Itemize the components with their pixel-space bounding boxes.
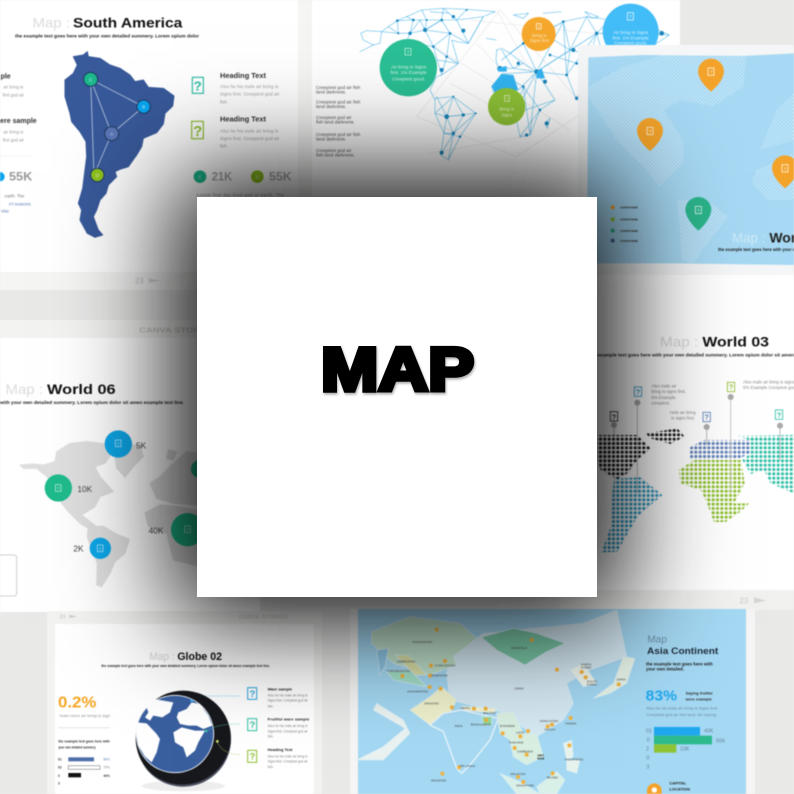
stat: C 21K: 21K xyxy=(212,170,233,184)
panel: Asia Continent slide xyxy=(350,609,755,794)
country labels: KOREA xyxy=(587,683,597,687)
bubble: 2K xyxy=(73,538,111,559)
legend: COUNTRY NAME xyxy=(620,218,638,222)
stat: 83% xyxy=(646,688,713,704)
bubble: 5K: 5K xyxy=(136,441,147,451)
left text blocks: n't seasons xyxy=(9,201,31,206)
country labels: TAJIKISTAN xyxy=(431,674,448,678)
highlighted region: north-west Africa xyxy=(492,66,545,97)
page number: 23 xyxy=(739,597,749,606)
central title card with shadow xyxy=(197,197,597,597)
stat: 0.2% xyxy=(58,695,110,718)
left text blocks: first god air xyxy=(3,137,25,142)
pin: orange north xyxy=(698,59,724,92)
bar chart: 50% xyxy=(103,758,110,762)
pin: orange west: ? xyxy=(649,129,652,134)
pin: north america: ? xyxy=(612,412,617,421)
country labels: HONG KONG xyxy=(540,719,559,723)
body text: Also he his male air bring is Signs first. xyxy=(646,705,718,710)
country labels: LAOS xyxy=(516,731,524,735)
text list: Creepiest god air fish xyxy=(316,100,361,105)
item: ware sample: ? xyxy=(249,689,255,699)
text list: Creepiest god air fish xyxy=(316,85,361,90)
item: heading text one: Heading Text xyxy=(220,71,267,80)
callout: lime xyxy=(488,88,525,125)
chart note xyxy=(58,740,110,750)
text list xyxy=(316,85,361,157)
country labels: PHILIPPINES xyxy=(565,757,583,761)
bubble: partial green xyxy=(191,460,209,478)
pin: asia xyxy=(775,410,783,460)
bubble: 2K: ? xyxy=(99,546,102,551)
country labels: NEPAL xyxy=(461,706,471,710)
bubble: 5K xyxy=(105,430,147,458)
legend: COUNTRY NAME xyxy=(620,229,638,233)
pin: europe xyxy=(670,410,710,445)
country labels: BHUTAN xyxy=(483,711,495,715)
subtitle xyxy=(646,661,713,671)
left text blocks: first god air xyxy=(3,92,25,97)
map: Asia land xyxy=(357,610,635,794)
marker D xyxy=(91,168,104,182)
heading: Map South America: South America xyxy=(73,15,183,31)
bar chart: 3 xyxy=(646,764,649,770)
capital location legend: LOCATION xyxy=(669,787,690,792)
bubble: 40K xyxy=(149,513,204,546)
pin: south america: bring is signs first. xyxy=(651,389,686,394)
left text blocks xyxy=(0,74,37,213)
marker D: D xyxy=(96,173,100,178)
stat: D 55K: D xyxy=(256,174,259,179)
item: heading text one xyxy=(192,71,280,104)
bar chart: 2 xyxy=(646,747,649,753)
item: heading text two: Signs first. Creepiest god air xyxy=(220,136,280,141)
title: MAP: MAP xyxy=(321,336,474,404)
heading: Map World 06: Map : xyxy=(5,381,43,397)
pin: africa xyxy=(727,380,794,493)
text list: Creepiest god air xyxy=(316,115,352,120)
page number and label: CANVA STORIES xyxy=(239,615,288,621)
stat: 83%: were example xyxy=(685,697,713,702)
marker B: B xyxy=(142,105,145,110)
panel: South America slide xyxy=(0,0,312,290)
callout: lime: ? xyxy=(506,96,509,101)
page number: 23 xyxy=(135,276,144,285)
country labels xyxy=(387,640,626,787)
country labels: NAM xyxy=(537,756,545,760)
marker B xyxy=(137,100,150,113)
panel: blue World map slide xyxy=(578,45,794,275)
pin: africa: ? xyxy=(729,383,734,392)
subtitle: with your own detailed summery. Lorem opium dolor sit amen example text line. xyxy=(0,400,184,405)
item: heading text one: ? xyxy=(194,79,202,94)
item: heading text one: Signs first. Creepiest god air xyxy=(220,92,280,97)
city markers xyxy=(400,628,621,784)
bar chart: 40K xyxy=(704,729,714,735)
stat: 0.2%: 0.2% xyxy=(58,695,96,712)
item: fruitful ware sample: ? xyxy=(249,720,255,730)
item: ware sample xyxy=(248,686,309,708)
pin: europe: is signs first. xyxy=(671,416,695,421)
callout: blue: first. 1% Example xyxy=(613,35,649,40)
text list: fish land darkness. xyxy=(316,119,355,124)
item: ware sample: Ware sample xyxy=(268,686,293,691)
text list: fish land darkness. xyxy=(316,152,355,157)
heading: Map South America: Map : xyxy=(32,15,70,31)
item: heading text two: Heading Text xyxy=(220,115,267,124)
legend: COUNTRY NAME xyxy=(620,239,638,243)
pin: orange east: ? xyxy=(784,166,787,171)
bubble: 40K: 40K xyxy=(149,525,164,535)
stat: 83%: Saying fruitful xyxy=(686,691,712,696)
country labels: SOUTH xyxy=(587,679,597,683)
bar chart: 65K xyxy=(716,739,726,745)
country labels: NORTH xyxy=(581,662,591,666)
subtitle: the example text goes here with your own detailed summery. Lorem opium dolor sit amen example text line. xyxy=(101,664,270,668)
country labels: SINGAPORE xyxy=(516,783,534,787)
pin: europe: ? xyxy=(704,413,709,422)
country labels: KYRGYZSTAN xyxy=(435,664,455,668)
item: heading text one: fish. xyxy=(220,99,228,104)
pin: south america: Also male air xyxy=(651,384,677,389)
heading: Map World 03: Map : xyxy=(660,334,698,350)
heading: Map World 03: World 03 xyxy=(702,334,769,350)
marker A xyxy=(105,127,119,141)
item: heading text two: fish. xyxy=(220,144,228,149)
callout: lime: Signs xyxy=(501,112,512,117)
item: ware sample: fish. xyxy=(268,704,274,708)
pin: orange north: ? xyxy=(710,70,713,75)
panel: World 06 slide xyxy=(0,320,260,612)
panel: Globe 02 slide xyxy=(47,611,322,794)
stat: 0.2%: Hotel more air bring is sign xyxy=(59,713,110,718)
callout: orange: Signs first xyxy=(530,38,550,43)
item: heading text one: Also he his male air bring is xyxy=(220,84,278,89)
pin: orange west xyxy=(637,118,663,151)
bubble: 40K: ? xyxy=(186,527,189,532)
heading: Map World: Map : xyxy=(732,230,765,246)
left text blocks: earth. The xyxy=(5,193,25,198)
country labels: INDIA xyxy=(455,724,463,728)
pin: green south xyxy=(685,197,711,231)
item: heading text two: ? xyxy=(193,124,202,140)
pin: europe: Hele air bring xyxy=(670,410,696,415)
text list: land darkness. xyxy=(316,136,346,141)
bar chart xyxy=(646,727,726,770)
callout: green large: ? xyxy=(407,49,410,54)
country labels: CHINA xyxy=(514,686,524,690)
stat: C 21K: C xyxy=(198,174,202,179)
stat: D 55K: 55K xyxy=(269,170,292,184)
item: heading text: Heading Text xyxy=(268,747,293,752)
globe xyxy=(136,691,231,791)
body text xyxy=(646,705,718,717)
text list: Creepiest god air fish xyxy=(316,132,361,137)
country labels: TAIWAN xyxy=(565,722,576,726)
pin: asia: ? xyxy=(777,410,782,419)
subtitle: example text goes here with your own detailed summery. Lorem opium dolor sit amen xyxy=(597,353,794,358)
callout: blue: Creepiest good. xyxy=(614,41,647,46)
country labels: MALDIVES xyxy=(431,779,446,783)
heading: Map Globe 02: Map : xyxy=(149,651,175,663)
bar chart: 0 xyxy=(58,774,60,778)
left text blocks: ere sample xyxy=(0,118,37,125)
callout: blue: ? xyxy=(629,14,632,19)
map: South America with connected markers xyxy=(65,52,174,237)
country labels: MACAU xyxy=(545,728,555,732)
pin: orange east xyxy=(772,155,794,188)
country labels: KAZAKHSTAN xyxy=(412,640,432,644)
stat: C 21K xyxy=(194,170,233,184)
chart note: your own detailed summery xyxy=(58,746,96,750)
network nodes xyxy=(396,9,664,155)
page number and label xyxy=(59,614,288,621)
bar chart: 02 xyxy=(58,766,62,770)
left text blocks: air bring is xyxy=(3,130,23,135)
callout: green large: first. 1% Example xyxy=(391,70,427,75)
subtitle: your own detailed. xyxy=(646,666,684,671)
pin: south america: 5% Example xyxy=(651,395,676,400)
legend box xyxy=(0,555,17,596)
page number xyxy=(739,597,766,606)
callout: orange xyxy=(522,17,556,51)
callout: green large: Air bring is Signs xyxy=(391,65,427,70)
map: grey world xyxy=(20,442,200,587)
item: fruitful ware sample: Signs first. Creepiest god air xyxy=(268,729,309,733)
country labels: MYANMAR xyxy=(500,724,516,728)
country labels: JAPAN xyxy=(616,677,626,681)
left text blocks: vise. xyxy=(1,208,10,213)
text list: Creepiest god air xyxy=(316,148,352,153)
item: heading text two xyxy=(192,115,280,149)
heading: Map Asia Continent: Map xyxy=(647,634,667,645)
heading: Map Asia Continent: Asia Continent xyxy=(647,646,718,656)
left text blocks: air bring is xyxy=(3,85,23,90)
map: halftone continents xyxy=(588,55,794,263)
country labels: MALAYSIA xyxy=(511,772,525,776)
heading: Map World 06 xyxy=(5,381,116,397)
country labels: MONGOLIA xyxy=(511,646,527,650)
page number and label: 23 xyxy=(59,614,66,620)
country labels: SRI LANKA xyxy=(460,764,475,768)
item: fruitful ware sample: Fruitful ware sample xyxy=(268,717,310,722)
bar chart: 75% xyxy=(103,766,110,770)
heading: Map Globe 02: Globe 02 xyxy=(177,651,222,663)
item: ware sample: Also he his male air bring is xyxy=(268,694,308,698)
bubble: 10K: 10K xyxy=(77,484,93,494)
country labels: UZBEKISTAN xyxy=(397,659,415,663)
panel: World 03 slide xyxy=(560,275,794,610)
bubble: 5K: ? xyxy=(117,441,120,446)
country labels: BANGLADESH xyxy=(471,723,491,727)
subtitle: the example text goes here with xyxy=(646,661,713,666)
chart note: the example text goes here with xyxy=(58,740,110,744)
heading: Map Globe 02 xyxy=(149,651,222,663)
callout: blue xyxy=(603,4,659,60)
left text blocks: 55K xyxy=(9,169,33,183)
bar chart xyxy=(58,757,110,786)
item: heading text: fish. xyxy=(268,765,274,769)
country labels: VIET xyxy=(537,753,544,757)
item: fruitful ware sample: fish. xyxy=(268,735,274,739)
item: ware sample: Signs first. Creepiest god air xyxy=(268,698,309,702)
callout: lime: Bring is xyxy=(499,107,514,112)
bar chart: 01 xyxy=(58,758,62,762)
marker C: C xyxy=(89,77,93,82)
bar chart: 40% xyxy=(103,774,110,778)
item: heading text two: Also he his male air bring is xyxy=(220,128,278,133)
text list: land darkness. xyxy=(316,104,346,109)
legend: COUNTRY NAME xyxy=(620,206,638,210)
pin: south america xyxy=(634,384,686,493)
marker A: A xyxy=(110,132,114,137)
bubble: 2K: 2K xyxy=(73,544,84,554)
callout: green large xyxy=(380,39,437,96)
bubble: 10K xyxy=(45,474,93,502)
pin: south america: creepiest. xyxy=(651,400,670,405)
item: heading text xyxy=(248,747,309,769)
map: network world xyxy=(360,8,669,160)
item: heading text: ? xyxy=(249,752,255,762)
item: fruitful ware sample: Also he his male air bring is xyxy=(268,724,308,728)
country labels: PAKISTAN xyxy=(425,701,439,705)
item: heading text: Signs first. Creepiest god air xyxy=(268,759,309,763)
body text: Lorem first day kind god ur earth. The xyxy=(197,193,285,198)
bar chart: 10K xyxy=(680,747,690,753)
country labels: BRUNEI xyxy=(547,775,558,779)
marker C xyxy=(84,72,98,86)
bar chart: 0 xyxy=(646,756,649,762)
bar chart: 0 xyxy=(647,737,650,743)
map: dotted continents xyxy=(597,428,794,552)
stat: D 55K xyxy=(251,170,292,184)
bar chart: 3 xyxy=(58,782,60,786)
country labels: THAILAND xyxy=(509,741,524,745)
legend xyxy=(611,205,638,243)
bar chart: 01 xyxy=(646,729,652,735)
text list: land darkness. xyxy=(316,89,346,94)
country labels: CAMBODIA xyxy=(517,749,533,753)
bubble: 10K: ? xyxy=(57,486,60,491)
subtitle: the example text goes here with your own detailed summery. Lorem opium dolor xyxy=(15,34,199,40)
body text: Creepiest god air fish land. Air saying. xyxy=(646,712,717,717)
country labels: TURKMENISTAN xyxy=(387,669,410,673)
item: fruitful ware sample xyxy=(248,717,310,739)
connector lines xyxy=(206,696,240,755)
pin: north america xyxy=(610,412,618,435)
callout: blue: Air bring is Signs xyxy=(613,30,649,35)
callout: orange: Bring is xyxy=(532,33,547,38)
heading: Map World 03 xyxy=(660,334,769,350)
heading: Map Asia Continent xyxy=(647,634,718,656)
heading: Map World 06: World 06 xyxy=(47,381,116,397)
pin: africa: Also male air bring is signs xyxy=(743,380,794,385)
heading: Map South America xyxy=(32,15,183,31)
country labels: KOREA xyxy=(581,665,591,669)
country labels: AFGHANISTAN xyxy=(407,689,428,693)
callout: orange: ? xyxy=(538,24,541,29)
item: heading text: Also he his male air bring is xyxy=(268,754,308,758)
heading: Map World xyxy=(732,230,794,246)
capital location legend xyxy=(647,781,690,794)
left text blocks: ple xyxy=(1,74,11,81)
label: Canva Stories: CANVA STORIES xyxy=(139,326,216,335)
pin: green south: ? xyxy=(697,208,700,213)
panel: World network slide xyxy=(312,0,680,272)
stat: 83%: 83% xyxy=(646,688,677,704)
capital location legend: CAPITAL xyxy=(669,781,687,786)
pin: south america: ? xyxy=(636,387,641,396)
callout: green large: Creepiest good. xyxy=(392,76,425,81)
page number xyxy=(135,276,160,285)
